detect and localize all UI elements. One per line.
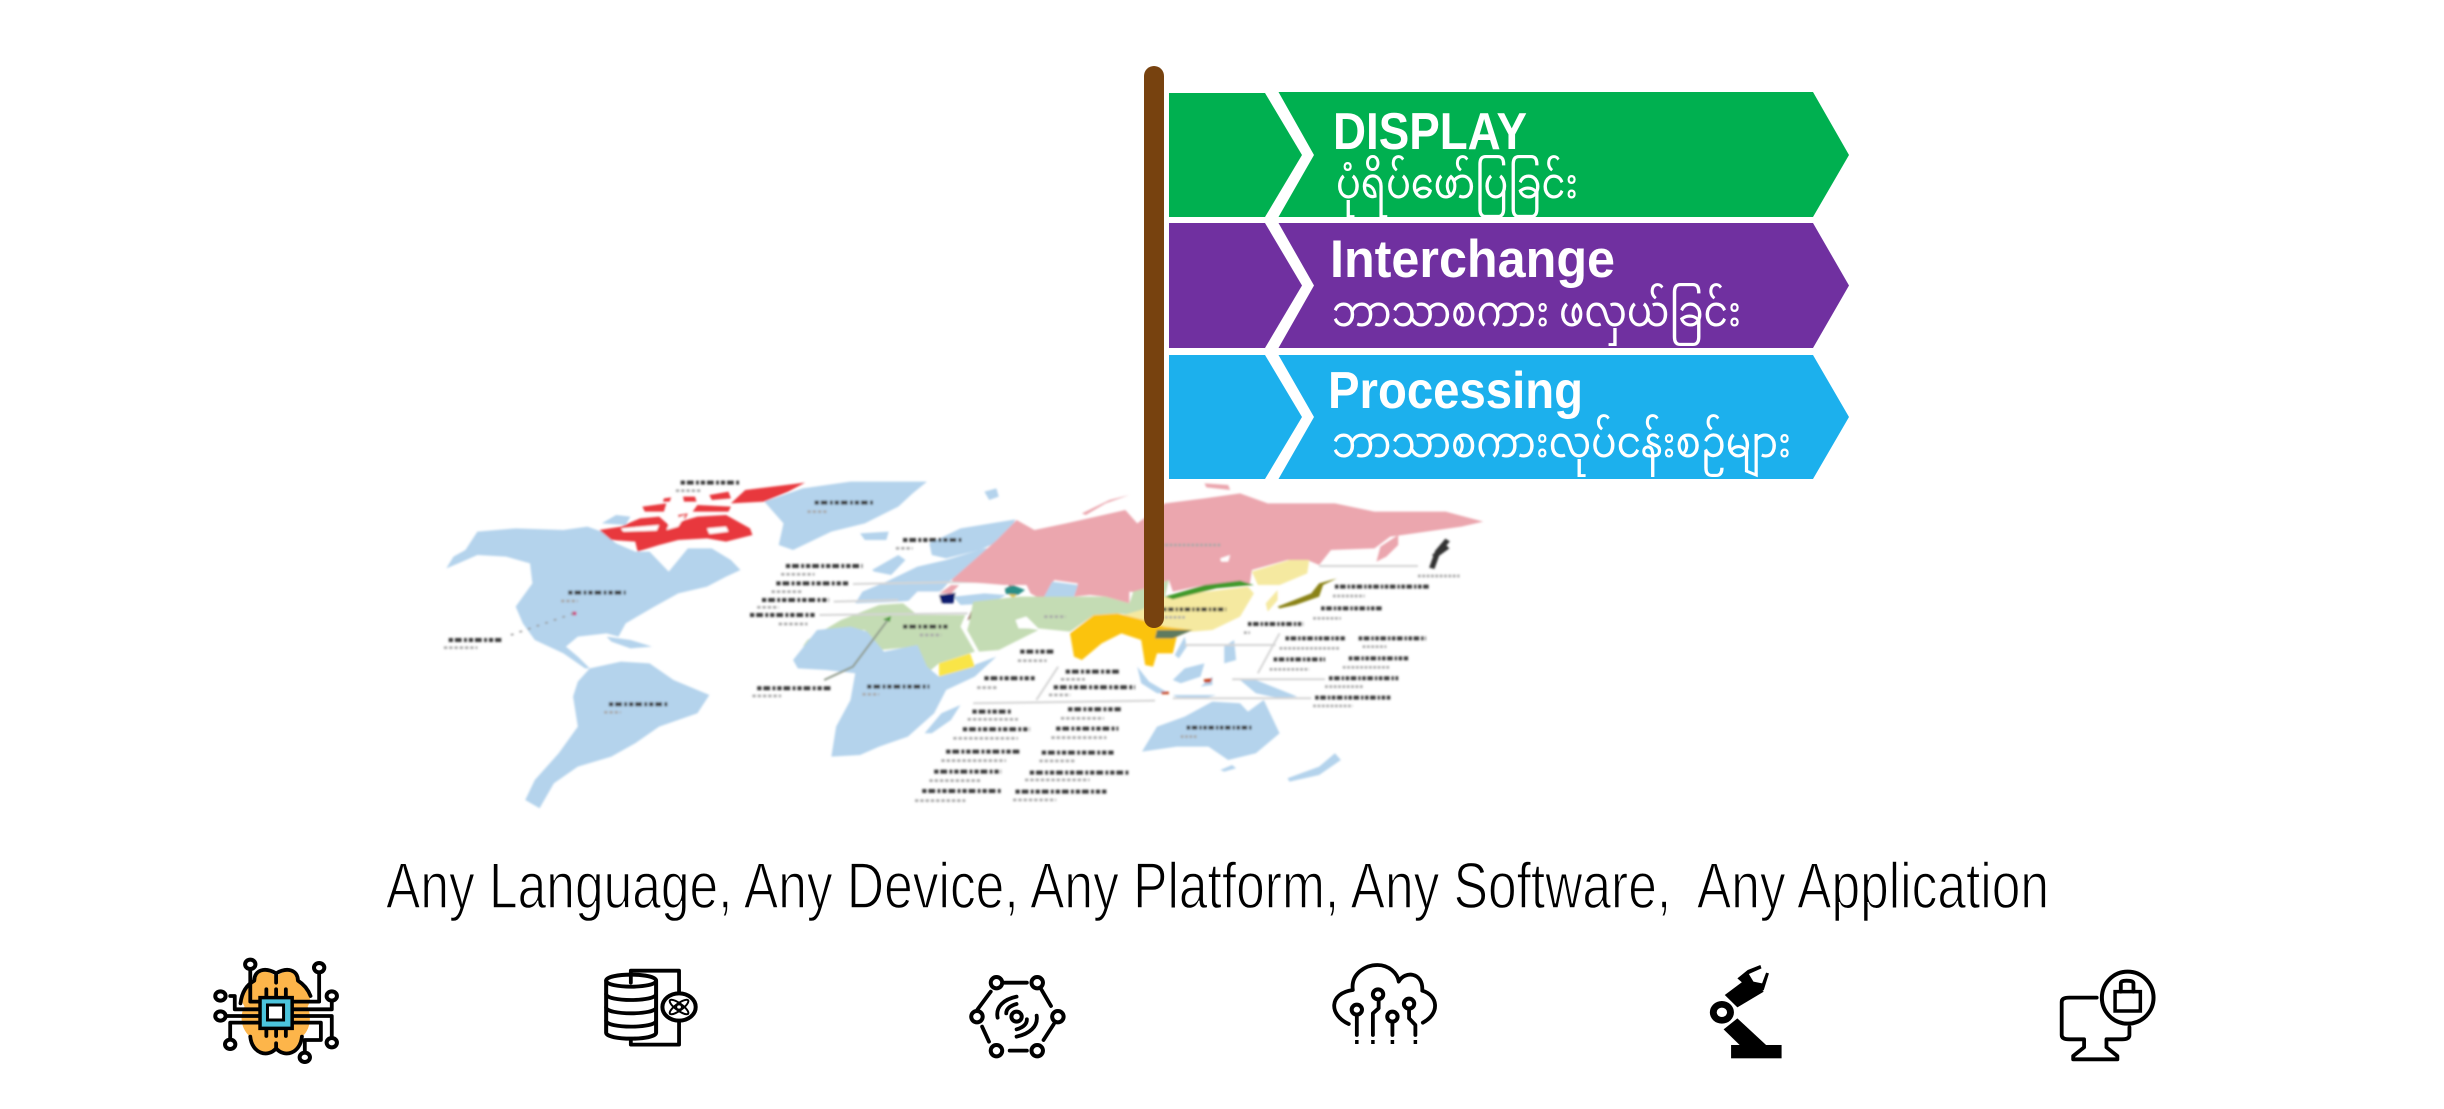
interchange arrow body bbox=[1278, 223, 1849, 348]
tagline: Any Language, Any Device, Any Platform, Any Software, Any Application bbox=[386, 849, 2049, 922]
flag pole bbox=[1144, 66, 1164, 628]
panel: Interchange bbox=[1169, 223, 1849, 363]
display Burmese caption: ပုံရိပ်ဖော်ပြခြင်း bbox=[1336, 141, 1578, 235]
icon: cloud circuit bbox=[1334, 965, 1435, 1044]
panel: DISPLAY bbox=[1169, 92, 1849, 235]
map small figure glyph bbox=[1432, 540, 1448, 568]
interchange Burmese caption: ဘာသာစကား ဖလှယ်ခြင်း bbox=[1332, 269, 1741, 363]
display arrow body bbox=[1278, 92, 1849, 217]
world language map bbox=[444, 482, 1483, 808]
interchange heading: Interchange bbox=[1330, 230, 1615, 289]
icon: AI brain chip bbox=[215, 960, 337, 1062]
processing Burmese caption: ဘာသာစကားလုပ်ငန်းစဉ်များ bbox=[1332, 400, 1791, 494]
map: Asia and Oceania bbox=[940, 483, 1483, 782]
map language labels, west bbox=[449, 483, 1135, 792]
display heading: DISPLAY bbox=[1333, 103, 1527, 161]
processing heading: Processing bbox=[1328, 362, 1583, 420]
interchange arrow tail bbox=[1169, 223, 1302, 348]
processing arrow body bbox=[1278, 355, 1849, 479]
icon: secure computer bbox=[2062, 972, 2154, 1059]
display arrow tail bbox=[1169, 93, 1302, 217]
map: Americas, Africa and Europe bbox=[446, 482, 1135, 808]
icon: robotic arm bbox=[1710, 965, 1782, 1058]
processing arrow tail bbox=[1169, 355, 1302, 479]
icon: quantum database bbox=[606, 971, 696, 1045]
map language sublabels bbox=[444, 491, 1106, 801]
icon: network hexagon signal bbox=[971, 977, 1064, 1056]
panel: Processing bbox=[1169, 355, 1849, 494]
map language labels, east bbox=[1163, 587, 1430, 728]
